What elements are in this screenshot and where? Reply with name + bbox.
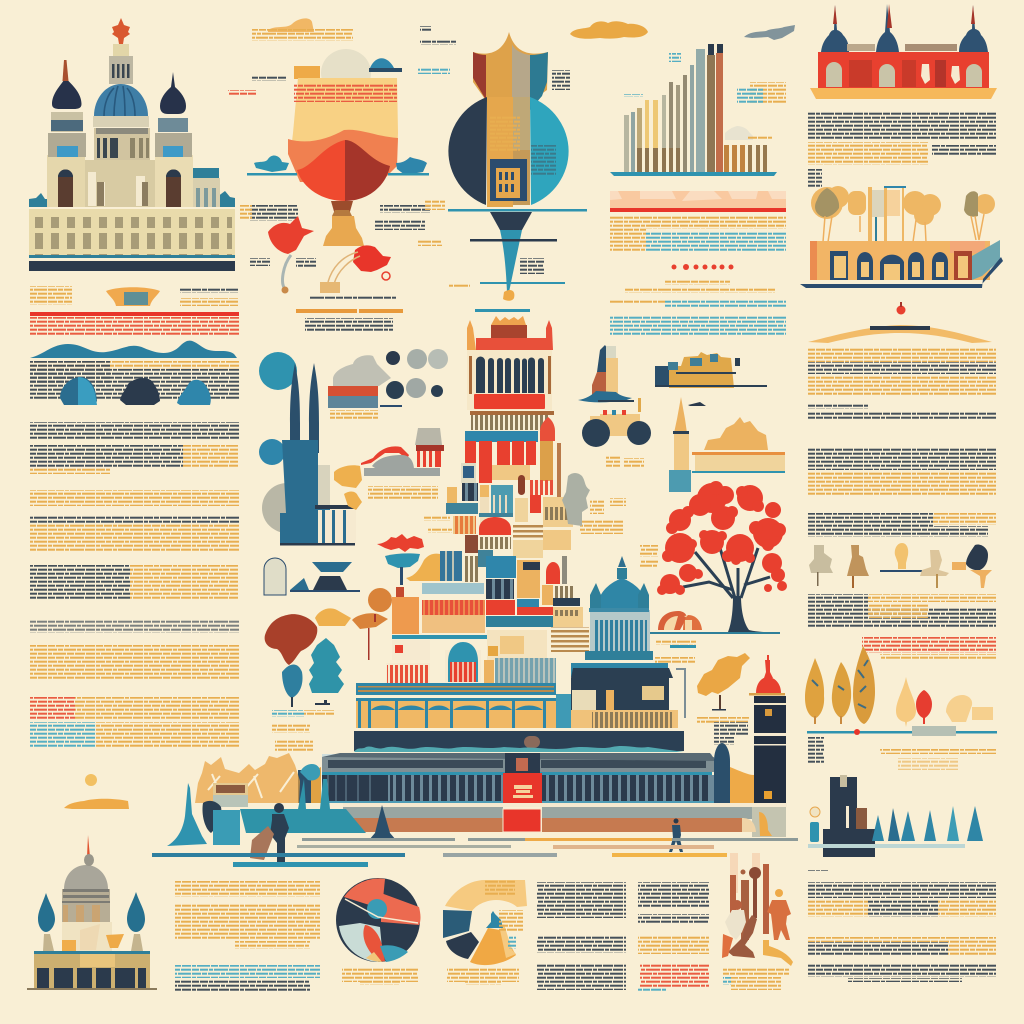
- illustration: grey cloud and dots: [328, 349, 448, 408]
- text block: balloon side notes: [240, 200, 445, 267]
- icons: row of small figures: [809, 543, 992, 588]
- illustration: trees and arcade building: [800, 186, 1003, 288]
- illustration: orange leaf tree: [697, 653, 750, 710]
- icon: orange blobs: [334, 465, 362, 510]
- illustration: domed building, bottom left: [27, 835, 157, 990]
- text block: chart notes: [623, 53, 786, 139]
- icon: boat with two wheels: [582, 398, 651, 447]
- icon: row of red dots: [672, 264, 734, 270]
- text block: cluster notes: [330, 410, 452, 533]
- illustration: central left tower cluster: [259, 352, 360, 595]
- illustration: yellow palace: [655, 352, 767, 388]
- text block: notes under leaf tree: [697, 717, 749, 745]
- illustration: pen nib chart: [448, 32, 587, 312]
- panel: peach band with red rule: [610, 191, 786, 212]
- text block: centred notes under balloon: [296, 296, 403, 332]
- heading bar: red: [30, 312, 239, 316]
- illustration: grey island: [744, 25, 795, 40]
- text block: dark paragraph: [30, 422, 239, 439]
- icon: red flower with stem: [268, 216, 314, 294]
- illustration: tower with red dome: [749, 655, 786, 803]
- text block: right column paragraph three: [808, 513, 996, 537]
- timeline: teal line with red dot: [807, 726, 997, 736]
- text block: bottom teal and dark paragraph: [175, 965, 320, 992]
- icon: striped domes: [658, 611, 702, 630]
- text block: dark and orange paragraph: [30, 565, 238, 600]
- text block: under red palace: [808, 111, 996, 187]
- illustration: orange palace with stripes: [688, 402, 785, 473]
- icon: teal mountain waves: [30, 341, 237, 358]
- illustration: traveller with suitcase: [250, 803, 289, 863]
- text block: dark and orange with shrub icons: [30, 361, 239, 405]
- illustration: autumn red tree: [265, 614, 317, 665]
- text block: red intro: [30, 317, 239, 335]
- text block: right column paragraph four: [808, 594, 996, 628]
- icon: red splash with curved lines: [320, 245, 391, 293]
- illustration: hot air balloon chart: [247, 49, 429, 246]
- bar chart: columns: [610, 44, 777, 176]
- illustration: small orange trees: [315, 588, 392, 660]
- illustration: golden trees and leaf icons: [805, 646, 993, 727]
- illustration: red bridge and small house: [361, 428, 444, 476]
- illustration: orange and teal tower: [669, 397, 691, 492]
- illustration: teal trees: [282, 638, 344, 707]
- illustration: figures with columns: [722, 853, 793, 966]
- text block: dark and orange paragraph: [30, 445, 238, 474]
- illustration: small clouds, lower left: [64, 774, 129, 809]
- text block: tree side notes: [640, 545, 696, 663]
- text block: notes below dots: [610, 280, 786, 335]
- text block: bottom right paragraphs: [808, 870, 996, 982]
- text block: orange paragraph: [30, 490, 239, 551]
- pie chart: red and navy segments: [336, 878, 420, 962]
- illustration: lighthouse on wave: [578, 345, 632, 402]
- text block: notes below boat: [580, 456, 644, 534]
- text block: right column paragraph one: [808, 348, 996, 395]
- illustration: machine block and teal cones: [808, 775, 983, 857]
- text block: red notes: [862, 637, 996, 659]
- illustration: grey tree: [562, 473, 590, 526]
- illustration: red and teal clouds with orange blob: [377, 534, 440, 597]
- text block: top centre notes: [228, 18, 456, 96]
- illustration: domed palace, top left: [29, 18, 235, 271]
- illustration: blue domed palace: [585, 556, 653, 660]
- illustration: bridge with red dot: [808, 302, 992, 343]
- illustration: red palace, top right: [810, 4, 997, 99]
- text block: pen nib side notes: [418, 68, 570, 288]
- text block: bottom centre column two: [638, 882, 709, 991]
- pie chart: yellow and navy ring: [443, 880, 527, 965]
- illustration: red blossom tree: [650, 481, 787, 634]
- illustration: orange grove and teal shapes: [167, 753, 396, 846]
- text block: tree notes: [272, 710, 334, 751]
- text block: caption under figures: [723, 968, 789, 990]
- text block: bottom orange paragraphs: [175, 881, 320, 949]
- decorative ground lines: [152, 838, 798, 867]
- text block: header notes, left column: [30, 286, 238, 306]
- text block: right column small notes: [808, 737, 996, 770]
- text block: muted paragraph: [30, 620, 239, 680]
- illustration: main palace complex: [298, 663, 787, 837]
- text block: orange and teal paragraph: [610, 215, 786, 251]
- illustration: orange cloud, top: [570, 21, 648, 39]
- text block: bottom centre column one: [537, 882, 626, 990]
- illustration: small walking person: [669, 818, 683, 852]
- text block: pie captions: [342, 968, 519, 985]
- text block: red and teal paragraph: [30, 697, 239, 747]
- text block: right column paragraph two: [808, 404, 996, 496]
- illustration: central tower mosaic: [386, 316, 589, 684]
